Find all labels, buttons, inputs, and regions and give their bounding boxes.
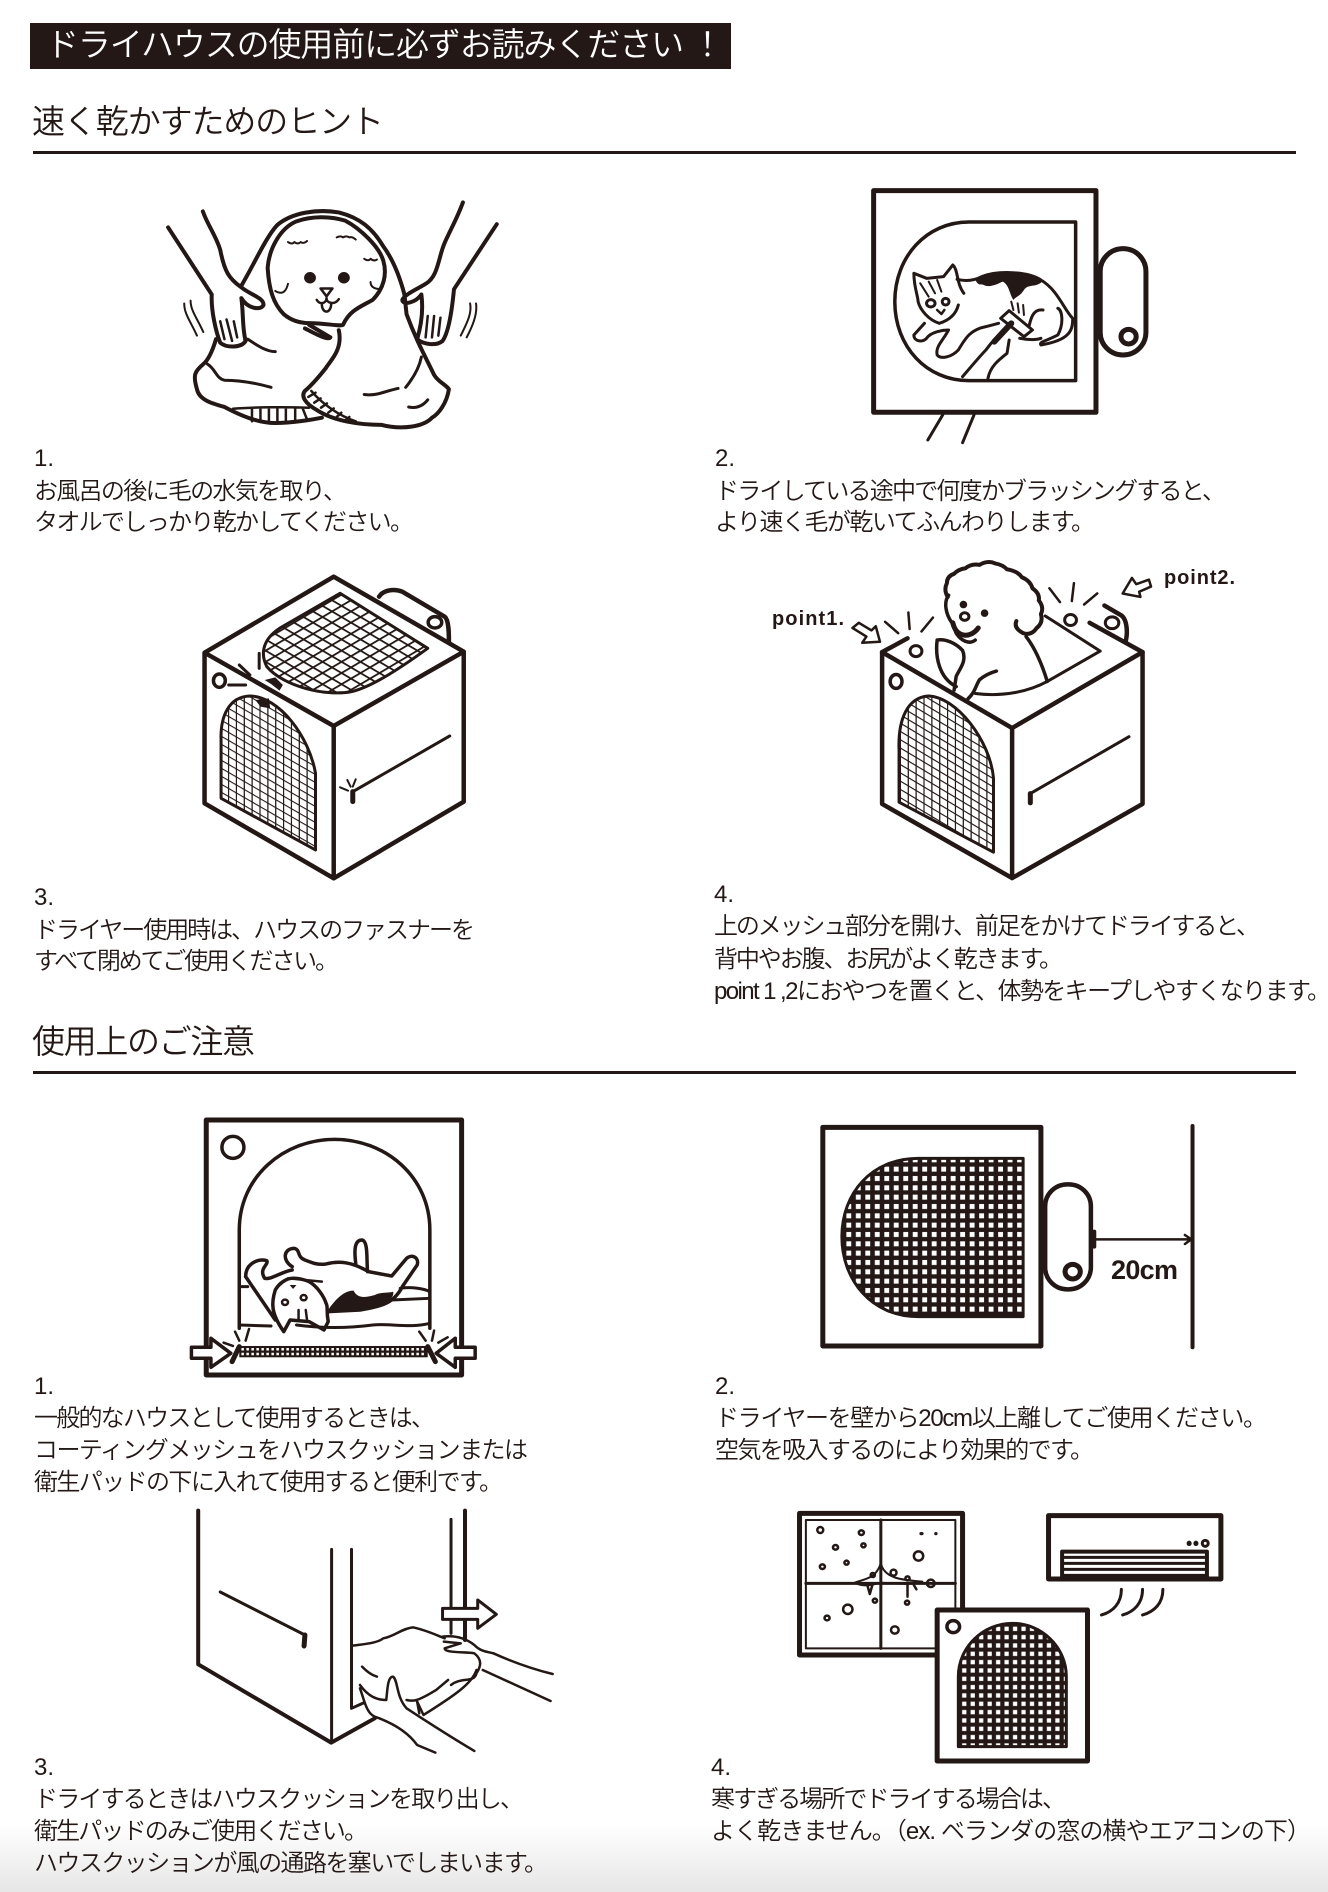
text: tip 1 [34,445,414,536]
text: tip 4: 上のメッシュ部分を開け、前足をかけてドライすると、 [714,913,1260,940]
title banner: ドライハウスの使用前に必ずお読みください ！ [46,26,724,63]
text: note 1: 衛生パッドの下に入れて使用すると便利です。 [34,1469,503,1496]
text: note 3: ハウスクッションが風の通路を塞いでしまいます。 [34,1850,548,1877]
text: note 4 [711,1754,1311,1845]
text: tip 4: point 1 ,2におやつを置くと、体勢をキープしやすくなります。 [714,978,1328,1005]
dryer house front [937,1610,1088,1761]
heading: usage precautions: 使用上のご注意 [32,1023,255,1060]
text: note 3 [34,1754,548,1877]
illustration: dog in open house with treat points [852,562,1151,878]
heading: tips for drying fast: 速く乾かすためのヒント [32,103,384,140]
text: note 2: 2. [715,1373,735,1400]
text: tip 4: 背中やお腹、お尻がよく乾きます。 [714,946,1063,973]
text: tip 3: すべて閉めてご使用ください。 [34,948,339,975]
text: tip 4: 4. [714,881,734,908]
illustration: brushing cat in house [874,191,1146,443]
text: note 3: ドライするときはハウスクッションを取り出し、 [34,1786,524,1813]
window [800,1513,963,1655]
text: tip 2: 2. [715,445,735,472]
text: tip 2: ドライしている途中で何度かブラッシングすると、 [715,478,1226,505]
text: note 1 [34,1373,528,1496]
text: tip 2 [715,445,1226,536]
text: note 3: 衛生パッドのみご使用ください。 [34,1818,368,1845]
text: note 2: ドライヤーを壁から20cm以上離してご使用ください。 [715,1405,1267,1432]
text: note 4: よく乾きません。（ex. ベランダの窓の横やエアコンの下） [711,1818,1311,1845]
illustration: dog in towel [168,202,497,427]
air conditioner [1049,1516,1221,1615]
text: tip 3 [34,884,475,975]
bottom page fade [0,1825,1328,1892]
illustration: cold window and air conditioner [800,1513,1221,1761]
text: tip 1: 1. [34,445,54,472]
illustration: dryer 20cm from wall [823,1126,1193,1347]
text: tip 1: タオルでしっかり乾かしてください。 [34,509,414,536]
text: note 4: 4. [711,1754,731,1781]
text: note 4: 寒すぎる場所でドライする場合は、 [711,1786,1066,1813]
text: note 3: 3. [34,1754,54,1781]
text: tip 4 [714,881,1328,1005]
label: point1: point1. [772,608,844,630]
heading: usage precautions [32,1023,1296,1074]
label: 20cm distance: 20cm [1111,1255,1178,1285]
text: note 2 [715,1373,1267,1464]
illustration: removing house cushion [198,1511,553,1753]
text: note 2: 空気を吸入するのにより効果的です。 [715,1437,1094,1464]
illustration: cat on cushion with coating mesh [191,1120,475,1375]
text: tip 3: 3. [34,884,54,911]
text: note 1: 一般的なハウスとして使用するときは、 [34,1405,435,1432]
text: tip 1: お風呂の後に毛の水気を取り、 [34,478,347,505]
heading: tips for drying fast [32,103,1296,154]
text: tip 3: ドライヤー使用時は、ハウスのファスナーを [34,917,475,944]
illustration: closed house cube [205,577,464,878]
text: note 1: 1. [34,1373,54,1400]
text: note 1: コーティングメッシュをハウスクッションまたは [34,1437,528,1464]
text: tip 2: より速く毛が乾いてふんわりします。 [715,509,1095,536]
label: point2: point2. [1164,567,1235,589]
